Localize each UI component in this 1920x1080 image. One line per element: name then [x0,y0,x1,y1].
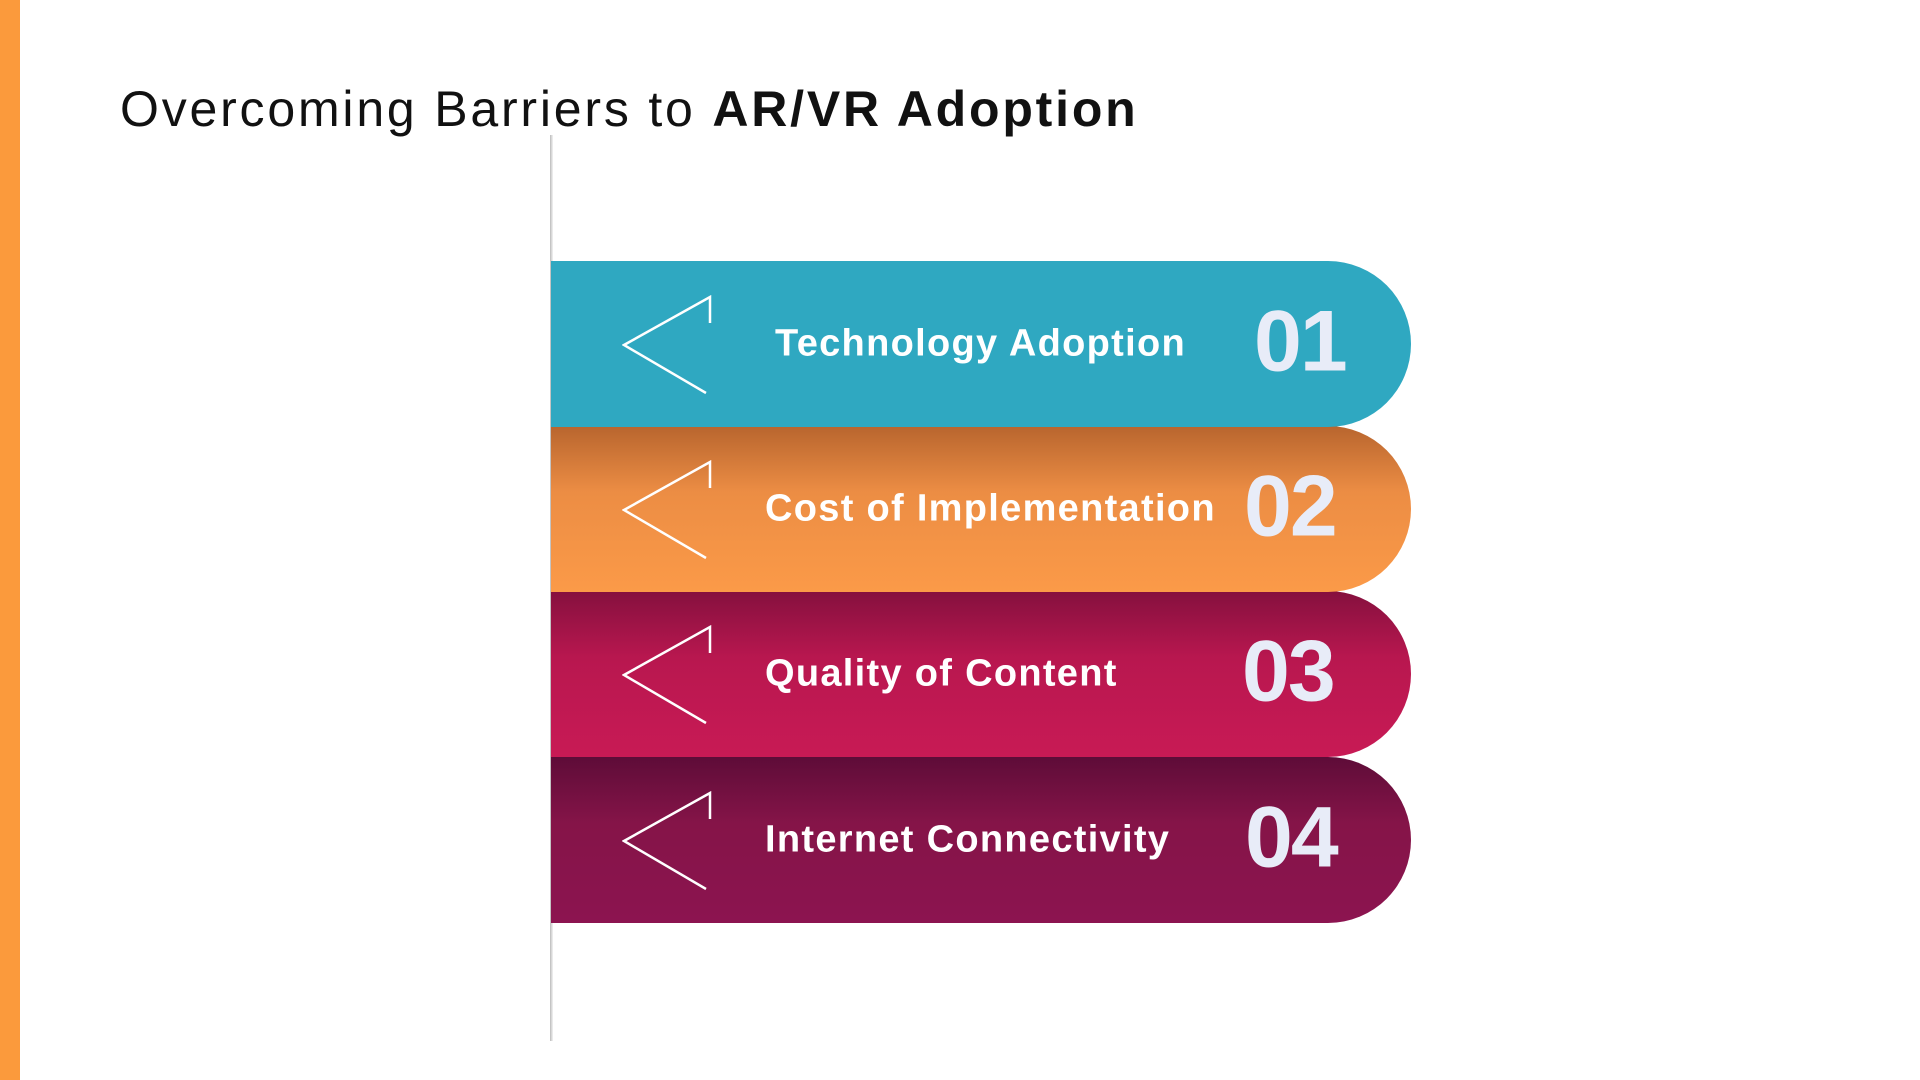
accent bar [0,0,20,1080]
chevron 3 [622,625,712,724]
bar 2 [551,426,1411,592]
chevron 1 [622,295,712,394]
label 2: Cost of Implementation [765,488,1216,530]
number 2: 02 [1244,459,1336,555]
bar 1 [551,261,1411,427]
number 1: 01 [1254,294,1346,390]
chevron 4 [622,791,712,890]
title: Overcoming Barriers to AR/VR Adoption [120,81,1139,137]
number 4: 04 [1245,790,1337,886]
label 3: Quality of Content [765,652,1118,694]
bar 4 [551,757,1411,923]
vertical line [550,135,553,1041]
bar 3 [551,591,1411,757]
label 4: Internet Connectivity [765,818,1170,860]
chevron 2 [622,460,712,560]
number 3: 03 [1242,624,1334,720]
label 1: Technology Adoption [775,322,1186,364]
